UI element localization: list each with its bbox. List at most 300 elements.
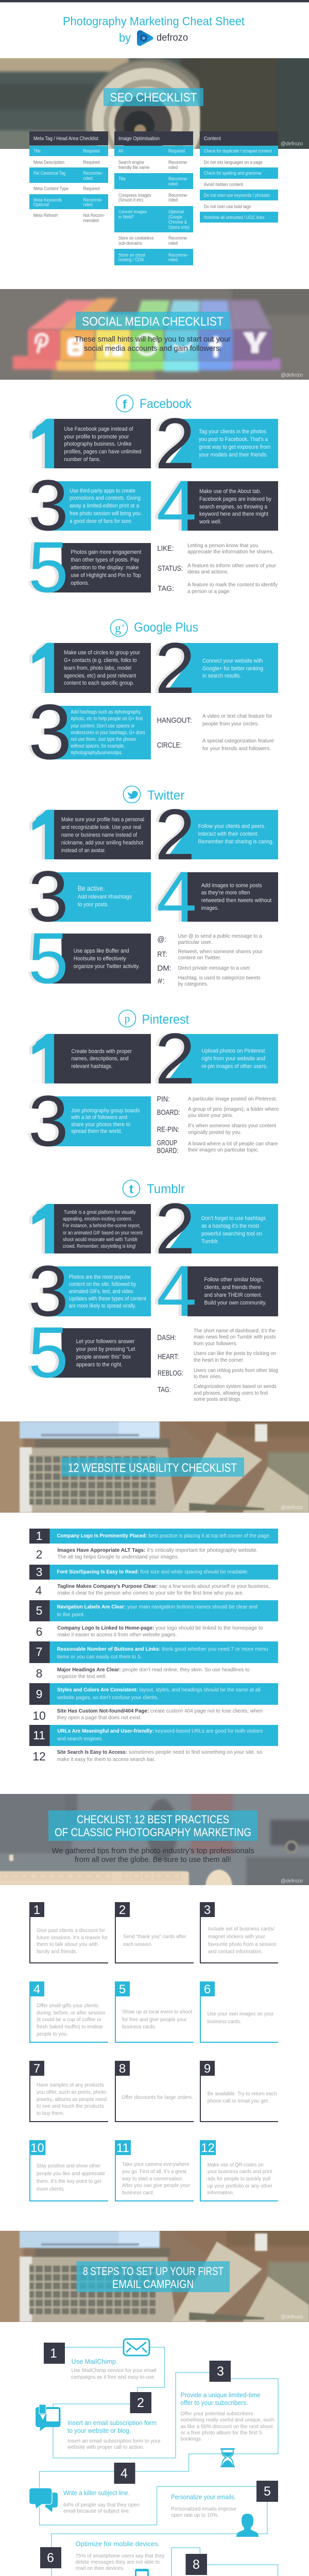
hero photo: chalk social icons with social media heading: [0, 284, 309, 387]
heading: Facebook: [116, 395, 192, 412]
hero photo: camera with SEO checklist heading: @defrozo: [281, 141, 303, 147]
heading: Facebook: Facebook: [140, 397, 192, 411]
heading: Pinterest: Pinterest: [142, 1012, 189, 1027]
panel: twitter tip 1: name or business name instead of: [61, 832, 138, 838]
usability checklist: sometimes people need to find something on your site, so: [129, 1750, 262, 1755]
usability checklist: 1: [36, 1529, 42, 1543]
card 12: Make use of QR-codes on: [208, 2162, 264, 2168]
card 3: and contact information.: [208, 1949, 263, 1955]
twitter glossary: Direct private message to a user.: [178, 965, 251, 971]
heading box: [104, 88, 203, 106]
hero photo: desk top view with best practices heading: [0, 1789, 309, 1904]
intro text: We gathered tips from the photo industry’s top professionals: [52, 1846, 254, 1855]
facebook glossary: Letting a person know that you: [187, 543, 259, 549]
panel: image optimisation table: Optional: [168, 209, 184, 214]
panel: pinterest tip 2: right from your website and: [202, 1056, 265, 1062]
panel: meta tag table: Required: [83, 148, 100, 154]
tumblr glossary: TAG:: [158, 1385, 171, 1394]
card 4: (it could be a cup of coffee or: [37, 2017, 102, 2023]
panel: twitter tip 2: [155, 794, 278, 875]
panel: content table: Avoid hidden content: [204, 182, 243, 187]
card 1: 1: [33, 1903, 40, 1917]
card 3: 3: [204, 1903, 211, 1917]
panel: image optimisation table: (Smush.It etc): [118, 197, 143, 202]
pinterest glossary: you store your pins.: [188, 1112, 233, 1118]
twitter glossary: Use @ to send a public message to a: [178, 933, 262, 939]
card 12: ads for people to quickly pull: [208, 2176, 270, 2182]
panel: tumblr tip 3: [28, 1250, 151, 1331]
step 6: Optimize for mobile devices.: [75, 2540, 160, 2548]
panel: image optimisation table: [114, 131, 193, 265]
panel: google plus tip 1: learn from, photo labs, model: [64, 665, 131, 671]
usability checklist: 2: [36, 1548, 42, 1561]
panel: tumblr tip 2: [155, 1188, 278, 1269]
facebook glossary: A feature to mark the content to identify: [187, 582, 278, 588]
intro text: social media accounts and gain followers.: [84, 344, 221, 353]
card 7: to buy them.: [37, 2111, 64, 2116]
step 5: 5: [264, 2484, 271, 2499]
usability checklist: Font Size/Spacing Is Easy to Read:: [57, 1569, 139, 1575]
usability checklist: your logo should be linked to the homepage to: [156, 1625, 263, 1631]
card 3: Include set of business cards/: [208, 1926, 274, 1932]
google plus glossary: for your friends and followers.: [202, 745, 271, 752]
panel: image optimisation table: Compress Images: [118, 193, 151, 198]
panel: meta tag table: Recomme-: [83, 171, 103, 176]
step 3: [180, 2361, 274, 2467]
panel: meta tag table: Meta Refresh: [33, 213, 58, 218]
panel: content table: Check for spelling and grammar: [204, 171, 262, 176]
panel: pinterest tip 3: share your photos there to: [71, 1122, 130, 1128]
card 10: Stay positive and show other: [37, 2163, 101, 2169]
card 5: [115, 1981, 194, 2042]
heading box: CHECKLIST: 12 BEST PRACTICES: [77, 1813, 229, 1826]
panel: twitter tip 3: Add relevant #hashtags: [78, 894, 132, 900]
panel: google plus tip 1: Make use of circles to group your: [64, 650, 140, 656]
panel: twitter tip 3: 3: [28, 856, 68, 937]
panel: facebook tip 1: photography business. Unlike: [64, 441, 131, 447]
tumblr glossary: The short name of dashboard, it’s the: [194, 1328, 276, 1334]
panel: image optimisation table: Image Optimisation: [118, 135, 160, 142]
panel: image optimisation table: Search engine: [118, 160, 144, 165]
usability checklist: and search engines.: [57, 1736, 103, 1742]
card 5: for free and give people your: [122, 2017, 187, 2023]
step 1: [44, 2339, 157, 2380]
twitter glossary: particular user.: [178, 939, 212, 945]
card 7: to see and touch the products: [37, 2104, 104, 2109]
panel: facebook tip 1: [29, 418, 151, 468]
card 4: 4: [33, 1982, 40, 1996]
heading: Pinterest: [118, 1010, 189, 1027]
card 6: 6: [204, 1982, 211, 1996]
panel: image optimisation table: Recomme-: [168, 252, 188, 258]
step 4: [29, 2463, 140, 2514]
card 4: [29, 1981, 108, 2042]
panel: image optimisation table: sub-domains: [118, 241, 143, 246]
panel: facebook tip 1: Use Facebook page instead of: [64, 426, 133, 432]
pinterest glossary: RE-PIN:: [157, 1125, 179, 1134]
panel: pinterest tip 1: [29, 1033, 151, 1083]
panel: image optimisation table: Recomme-: [168, 235, 188, 241]
usability checklist: to the point.: [57, 1612, 85, 1618]
hero photo: laptop desk with email steps heading: @defrozo: [281, 2314, 303, 2320]
panel: google plus tip 3: underscores in your hashtags, G+ does: [71, 730, 145, 736]
card 9: Be available. Try to return each: [208, 2091, 277, 2097]
card 12: your business cards and print: [208, 2169, 272, 2175]
usability checklist: Tagline Makes Company’s Purpose Clear:: [57, 1584, 158, 1589]
panel: image optimisation table: Chrome &: [168, 219, 187, 225]
panel: tumblr tip 3: are more likely to spread virally.: [69, 1303, 136, 1309]
heading box: SOCIAL MEDIA CHECKLIST: [82, 315, 224, 329]
usability checklist: make it clear for the person who comes to your site for the first time who you are.: [57, 1590, 244, 1596]
tumblr glossary: Categorization system based on words: [194, 1383, 277, 1389]
tumblr glossary: [157, 1328, 278, 1402]
card 11: business card.: [122, 2190, 154, 2196]
panel: content table: Do not over-use bold tags: [204, 204, 251, 209]
panel: pinterest tip 1: names, descriptions, and: [71, 1056, 129, 1062]
usability checklist: people don’t read online, they skim. So use headlines to: [123, 1667, 250, 1673]
panel: google plus tip 2: 2: [155, 628, 195, 708]
card 1: Give past clients a discount for: [37, 1928, 106, 1934]
step 2: 2: [137, 2396, 144, 2410]
top bar: [0, 0, 309, 2]
card 6: [200, 1981, 278, 2042]
panel: content table: Do not over-use keywords / phrases: [204, 193, 270, 198]
icon: phone: [135, 2569, 149, 2576]
card 5: business cards.: [122, 2024, 156, 2030]
panel: facebook tip 2: 2: [155, 403, 195, 484]
panel: twitter tip 1: instead of an avatar.: [61, 848, 106, 854]
usability checklist: best practice is placing it at top left corner of the page.: [148, 1533, 271, 1539]
panel: google plus tip 3: #photo, etc to help people on G+ find: [71, 716, 143, 722]
panel: content table: Check for duplicate / scraped content: [204, 148, 272, 154]
facebook glossary: appreciate the information he shares.: [187, 549, 274, 555]
pinterest glossary: PIN:: [157, 1095, 170, 1104]
panel: image optimisation table: nded: [168, 165, 178, 170]
panel: tumblr tip 5: Let your followers answer: [76, 1338, 135, 1345]
facebook glossary: ideas and actions.: [187, 569, 229, 575]
pinterest glossary: BOARD:: [157, 1146, 178, 1155]
panel: meta tag table: nded: [83, 202, 93, 207]
panel: twitter tip 5: [28, 918, 151, 998]
panel: facebook tip 4: work well.: [199, 519, 221, 525]
panel: twitter tip 4: images.: [201, 905, 219, 911]
heading box: EMAIL CAMPAIGN: [112, 2278, 194, 2291]
card 7: jewelry, albums as people need: [36, 2097, 107, 2103]
panel: twitter tip 4: as they’re more often: [201, 890, 250, 896]
panel: facebook tip 5: than other types of posts. Pay: [71, 557, 140, 563]
panel: google plus tip 1: agencies, etc) and post relevant: [64, 673, 136, 679]
panel: twitter tip 3: [28, 856, 151, 937]
card 1: them to talk about you with: [37, 1942, 98, 1947]
heading box: 12 WEBSITE USABILITY CHECKLIST: [68, 1461, 237, 1475]
panel: tumblr tip 1: crowd. Remember, storytelling is king!: [63, 1244, 136, 1249]
card 11: way to start a conversation.: [122, 2176, 183, 2182]
panel: facebook tip 5: [28, 527, 151, 607]
usability checklist: [29, 1529, 278, 1763]
card 3: [200, 1902, 278, 1963]
card 4: during, before, or after session: [37, 2010, 106, 2016]
panel: facebook tip 4: search engines, so throwing a: [199, 504, 268, 510]
tumblr glossary: the heart in the corner.: [194, 1357, 244, 1363]
card 11: 11: [116, 2141, 129, 2155]
step 3: Offer your potential subscribers: [180, 2411, 253, 2417]
card 11: [115, 2140, 194, 2201]
step 6: 75% of smartphone users say that they: [75, 2553, 165, 2559]
intro text: These small hints will help you to start out your: [75, 335, 231, 344]
panel: image optimisation table: nded: [168, 197, 178, 202]
card 1: [29, 1902, 108, 1963]
heading box: 8 STEPS TO SET UP YOUR FIRST: [83, 2265, 224, 2278]
card 12: up your portfolio or any other: [208, 2183, 272, 2189]
intro text: [52, 1846, 254, 1864]
panel: facebook tip 5: attention to the display: make: [71, 565, 139, 571]
usability checklist: create custom 404 page not to lose clients, when: [150, 1708, 263, 1714]
panel: facebook tip 2: great way to get exposure from: [199, 444, 270, 450]
facebook glossary: TAG:: [158, 584, 174, 593]
panel: image optimisation table: Required: [168, 148, 185, 154]
card 2: each session.: [123, 1942, 152, 1947]
panel: facebook tip 5: use of Highlight and Pin to Top: [71, 572, 141, 579]
usability checklist: 11: [33, 1728, 45, 1742]
panel: pinterest tip 2: re-pin images of other users.: [202, 1063, 268, 1070]
google plus glossary: A video or text chat feature for: [202, 713, 272, 719]
google plus glossary: A special categorization feature: [202, 738, 274, 744]
twitter glossary: DM:: [157, 964, 171, 973]
panel: image optimisation table: Store on cookieless: [118, 235, 154, 241]
panel: tumblr tip 1: For instance, a behind-the-scene report,: [63, 1223, 141, 1229]
panel: meta tag table: Required: [83, 160, 100, 165]
panel: pinterest tip 3: Join photography group boards: [71, 1108, 140, 1114]
step 6: 6: [47, 2551, 54, 2565]
panel: pinterest tip 1: 1: [29, 1018, 70, 1099]
twitter glossary: RT:: [157, 950, 167, 959]
step 2: to your website or blog.: [67, 2427, 131, 2434]
step 8: [180, 2554, 272, 2576]
panel: tumblr tip 5: 5: [28, 1312, 68, 1393]
panel: image optimisation table: Recomme-: [168, 176, 188, 181]
panel: facebook tip 4: keyword here and there might: [199, 511, 268, 517]
heading: Google Plus: g: [115, 622, 121, 635]
panel: meta tag table: Required: [83, 186, 100, 191]
panel: image optimisation table: hosting / CDN: [118, 257, 144, 262]
usability checklist: it’s critically important for photography website.: [147, 1548, 258, 1553]
card 9: 9: [204, 2062, 211, 2076]
panel: content table: [200, 131, 278, 223]
tumblr glossary: HEART:: [158, 1352, 179, 1361]
panel: tumblr tip 5: your post by pressing “Let: [76, 1346, 135, 1352]
step 3: as like a 50% discount on the next shoot: [180, 2424, 273, 2430]
panel: tumblr tip 3: 3: [28, 1250, 68, 1331]
panel: google plus tip 3: not use them. Just type the phrase: [71, 737, 136, 742]
usability checklist: URLs Are Meaningful and User-friendly:: [57, 1728, 154, 1734]
card 6: business cards.: [208, 2019, 242, 2025]
card 7: you offer, such as prints, photo: [37, 2090, 106, 2095]
panel: twitter tip 1: nickname, add your smiling headshot: [61, 840, 143, 846]
usability checklist: Navigation Labels Are Clear:: [57, 1604, 126, 1610]
step 4: email because of subject line.: [63, 2509, 130, 2514]
panel: tumblr tip 1: appealing, emotion-inciting content.: [63, 1216, 132, 1222]
panel: image optimisation table: nded: [168, 241, 178, 246]
google plus glossary: CIRCLE:: [157, 741, 182, 750]
panel: meta tag table: Not Recom-: [83, 213, 105, 218]
panel: facebook tip 1: number of fans.: [64, 456, 100, 463]
usability checklist: 3: [36, 1565, 42, 1579]
hero photo: chalk social icons with social media heading: @defrozo: [281, 372, 303, 378]
step 5: open rate up to 10%.: [171, 2513, 219, 2518]
title: by: [119, 31, 131, 44]
usability checklist: Site Search Is Easy to Access:: [57, 1750, 127, 1755]
step 4: Write a killer subject line.: [63, 2489, 130, 2497]
panel: facebook tip 2: you post to Facebook. That’s a: [199, 436, 268, 443]
heading box: SEO CHECKLIST: [110, 91, 197, 105]
usability checklist: make it easy for them to access search bar.: [57, 1757, 156, 1762]
panel: facebook tip 1: 1: [29, 403, 70, 484]
panel: facebook tip 2: your models and their friends.: [199, 452, 268, 458]
panel: facebook tip 4: [157, 465, 278, 546]
tumblr glossary: some posts and blogs.: [194, 1396, 242, 1402]
step 3: bookings.: [180, 2436, 202, 2442]
panel: twitter tip 2: Interact with their content.: [198, 831, 259, 837]
panel: twitter tip 5: 5: [28, 918, 68, 998]
step 1: Use MailChimp.: [71, 2358, 117, 2365]
usability checklist: make it easier to access it from other website pages.: [57, 1632, 177, 1638]
panel: google plus tip 1: G+ contacts (e.g. clients, folks to: [64, 657, 137, 664]
step 6: [40, 2540, 165, 2576]
heading: Facebook: f: [123, 398, 127, 412]
title: [63, 14, 245, 46]
card 4: Offer small gifts your clients: [37, 2003, 98, 2009]
card 9: [200, 2061, 278, 2122]
card 11: you go. First of all, it’s a great: [122, 2169, 186, 2175]
icon: envelope: [124, 2339, 149, 2355]
card 8: [115, 2061, 194, 2122]
card 2: 2: [119, 1903, 126, 1917]
panel: twitter tip 3: Be active.: [78, 884, 105, 892]
panel: meta tag table: Rel Canonical Tag: [33, 171, 65, 176]
pinterest glossary: A board where a lot of people can share: [188, 1141, 278, 1147]
panel: tumblr tip 3: animated GIFs, text, and video.: [69, 1289, 134, 1295]
panel: google plus tip 3: without spaces, for example,: [71, 743, 125, 749]
card 4: people to you.: [37, 2031, 68, 2037]
heading: Pinterest: p: [125, 1012, 130, 1025]
twitter glossary: @:: [157, 935, 166, 944]
usability checklist: Images Have Appropriate ALT Tags:: [57, 1548, 145, 1553]
panel: pinterest tip 3: spread them the world.: [71, 1128, 122, 1134]
panel: meta tag table: Meta Keywords: [33, 197, 62, 202]
facebook glossary: a person or a page.: [187, 588, 231, 595]
step 2: [36, 2392, 161, 2450]
panel: image optimisation table: to WebP: [118, 214, 134, 219]
step 3: or a free photo album for the first 5: [180, 2430, 262, 2436]
card 1: family and friends.: [37, 1949, 77, 1955]
step 3: 3: [217, 2364, 224, 2379]
usability checklist: 7: [36, 1645, 42, 1658]
usability checklist: 9: [36, 1687, 42, 1701]
panel: tumblr tip 2: Tumblr.: [201, 1239, 219, 1245]
card 6: Use your own images on your: [208, 2011, 274, 2017]
hero photo: desk top view with best practices heading: @defrozo: [281, 1878, 303, 1884]
usability checklist: 5: [36, 1604, 42, 1617]
panel: pinterest tip 3: with a lot of followers and: [71, 1114, 127, 1121]
facebook glossary: A feature to inform other users of your: [187, 563, 276, 569]
pinterest glossary: their images on particular topic.: [188, 1147, 259, 1153]
panel: twitter tip 4: [157, 856, 278, 937]
usability checklist: Major Headings Are Clear:: [57, 1667, 121, 1673]
panel: facebook tip 3: a good dose of fans for sure.: [70, 518, 132, 524]
panel: image optimisation table: nded: [168, 257, 178, 262]
panel: image optimisation table: Convert Images: [118, 209, 147, 214]
twitter glossary: by categories.: [178, 981, 208, 987]
panel: tumblr tip 3: content on the site, followed by: [69, 1281, 136, 1287]
usability checklist: font size and white spacing should be readable.: [140, 1569, 249, 1575]
panel: google plus tip 3: #photographybusinesstips.: [71, 750, 123, 756]
panel: google plus tip 1: 1: [29, 627, 70, 708]
card 11: After you can give people your: [122, 2183, 191, 2189]
panel: tumblr tip 4: and share THEIR content.: [204, 1292, 262, 1298]
facebook glossary: [157, 543, 278, 595]
panel: meta tag table: Optional: [33, 202, 49, 207]
heading box: [61, 1458, 244, 1477]
panel: facebook tip 2: [155, 403, 278, 484]
card 3: magnet stickers with your: [208, 1934, 266, 1940]
panel: tumblr tip 2: as a hashtag it’s the most: [201, 1223, 259, 1229]
panel: facebook tip 4: Facebook pages are indexed by: [199, 496, 271, 502]
panel: content table: Nofollow all untrusted / UGC links: [204, 215, 265, 220]
usability checklist: Styles and Colors Are Consistent:: [57, 1687, 138, 1693]
usability checklist: 6: [36, 1625, 42, 1638]
hero photo: camera with SEO checklist heading: [0, 53, 309, 187]
heading: Google Plus: Google Plus: [134, 620, 198, 635]
heading: Tumblr: Tumblr: [147, 1182, 185, 1196]
card 12: information.: [208, 2190, 234, 2196]
tumblr glossary: to their ones.: [194, 1374, 222, 1380]
card 7: [29, 2061, 108, 2122]
panel: tumblr tip 4: Build your own community.: [204, 1300, 267, 1306]
panel: tumblr tip 4: Follow other similar blogs,: [204, 1277, 264, 1283]
card 12: [200, 2140, 278, 2201]
pinterest glossary: A particular image posted on Pinterest.: [188, 1096, 277, 1102]
heading: Tumblr: [123, 1180, 185, 1197]
icon: chat bubbles: [29, 2488, 58, 2512]
panel: tumblr tip 2: powerful searching tool on: [201, 1231, 262, 1237]
panel: twitter tip 4: retweeted then tweets without: [201, 897, 271, 904]
icon: defrozo logo: [137, 30, 153, 46]
card 12: 12: [201, 2141, 215, 2155]
panel: pinterest tip 2: 2: [155, 1018, 195, 1099]
card 2: Send “thank you” cards after: [123, 1934, 186, 1940]
step 3: Provide a unique limited-time: [180, 2391, 261, 2399]
panel: twitter tip 5: organize your Twitter activity.: [74, 963, 140, 970]
panel: facebook tip 5: 5: [28, 527, 68, 607]
heading: Tumblr: t: [129, 1182, 133, 1196]
panel: pinterest tip 1: Create boards with proper: [71, 1048, 132, 1055]
usability checklist: Company Logo Is Linked to Home-page:: [57, 1625, 154, 1631]
twitter glossary: [157, 933, 263, 987]
pinterest glossary: It’s when someone shares your content: [188, 1123, 276, 1129]
panel: google plus tip 3: [28, 688, 151, 776]
usability checklist: think good whether you need 7 or more menu: [162, 1647, 268, 1652]
card 10: them. It’s the key point to get: [37, 2179, 101, 2184]
panel: tumblr tip 1: or an animated GIF based on your recent: [63, 1230, 143, 1236]
heading box: OF CLASSIC PHOTOGRAPHY MARKETING: [55, 1826, 251, 1839]
panel: facebook tip 1: your profile to promote your: [64, 434, 129, 440]
panel: tumblr tip 5: [28, 1312, 151, 1393]
panel: image optimisation table: Opera only): [168, 225, 190, 230]
step 2: Insert an email subscription form to your: [67, 2438, 161, 2444]
panel: tumblr tip 4: 4: [157, 1250, 197, 1331]
panel: twitter tip 5: Hootsuite to effectively: [74, 956, 126, 962]
twitter glossary: Hashtag, is used to categorize tweets: [178, 975, 261, 981]
